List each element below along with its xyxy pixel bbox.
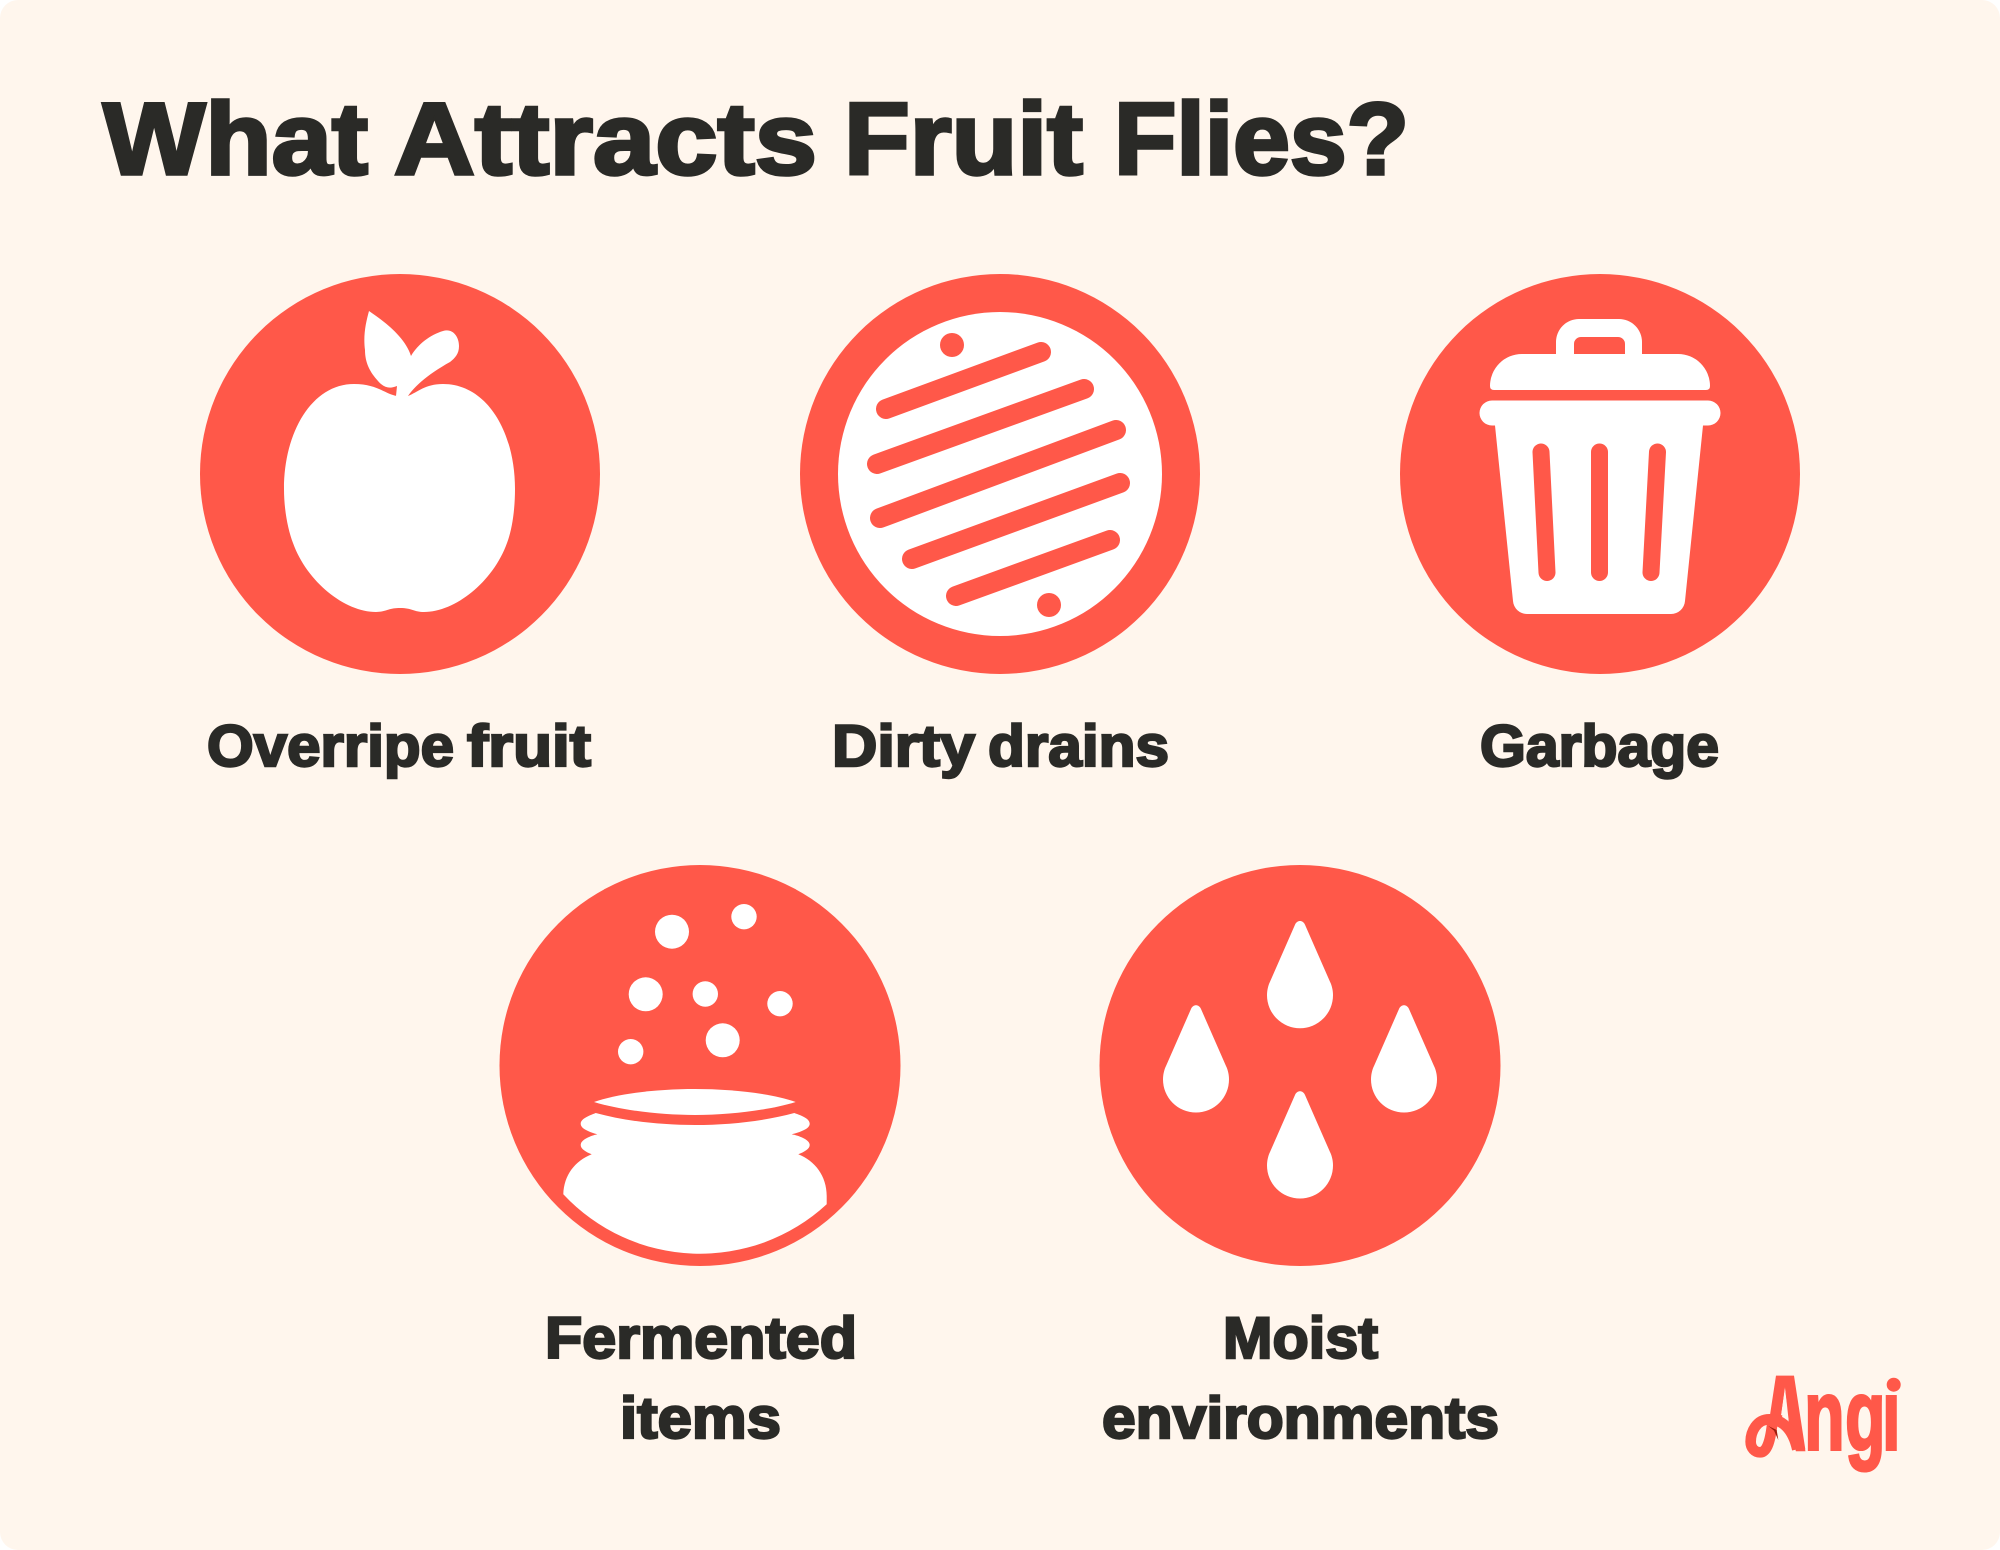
title: Attracts (394, 82, 817, 196)
label: moist environments (1102, 1306, 1499, 1451)
icon: fermenting pot (500, 865, 900, 1266)
label: overripe fruit: Overripe (207, 714, 454, 779)
logo: Angi: A (1766, 1360, 1806, 1472)
panel: overripe fruit (200, 274, 600, 779)
icon: water drops (1100, 865, 1500, 1266)
title: Flies? (1114, 82, 1409, 196)
logo: Angi (1751, 1358, 1906, 1472)
label: fermented items: items (620, 1386, 781, 1451)
label: dirty drains (832, 714, 1169, 779)
title: What (103, 82, 368, 196)
icon: drain (800, 274, 1200, 674)
label: garbage: Garbage (1480, 714, 1719, 779)
panel: dirty drains (800, 274, 1200, 779)
title: Fruit (844, 82, 1083, 196)
label: moist environments: environments (1102, 1386, 1499, 1451)
icon: apple (200, 274, 600, 674)
title (103, 82, 1409, 196)
label: overripe fruit: fruit (467, 714, 591, 779)
panel: garbage (1400, 274, 1800, 779)
panel: fermented items (500, 865, 900, 1451)
label: fermented items (545, 1306, 857, 1451)
label: moist environments: Moist (1223, 1306, 1378, 1371)
label: dirty drains: Dirty (832, 714, 975, 779)
label: overripe fruit (207, 714, 591, 779)
icon: trash can (1400, 274, 1800, 674)
logo: Angi: ngi (1804, 1358, 1900, 1471)
label: fermented items: Fermented (545, 1306, 857, 1371)
label: dirty drains: drains (988, 714, 1169, 779)
panel: moist environments (1100, 865, 1500, 1451)
